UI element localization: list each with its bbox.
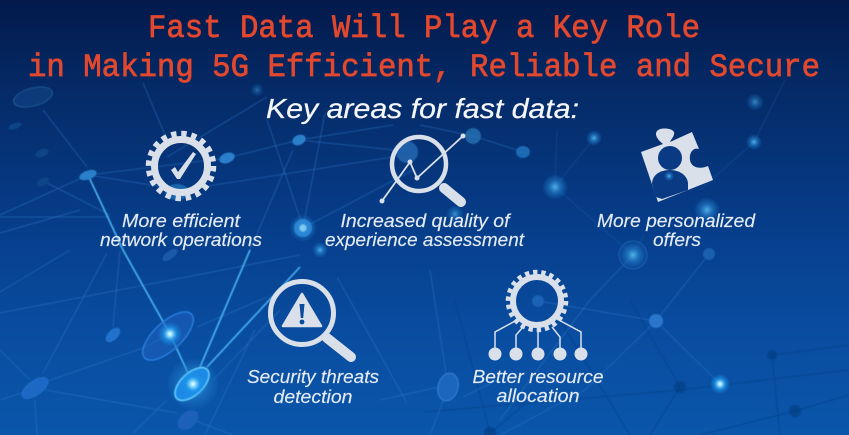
icon: gear with check mark: [148, 134, 214, 198]
label: [325, 211, 525, 250]
item: network operations: [100, 134, 262, 250]
icon: puzzle piece with person: [641, 128, 713, 202]
icon: gear with five nodes: [488, 272, 588, 360]
label: [247, 367, 379, 407]
label: offers: [653, 230, 701, 250]
label: [597, 211, 756, 250]
label: More personalized: [597, 211, 756, 231]
label: Increased quality of: [340, 211, 512, 231]
title: [28, 10, 820, 86]
title: Fast Data Will Play a Key Role: [148, 10, 700, 47]
label: [100, 211, 262, 250]
icon: magnifier with warning triangle: [270, 282, 351, 357]
label: More efficient: [122, 211, 241, 231]
item: quality of experience: [325, 134, 525, 250]
item: personalized offers: [597, 128, 756, 250]
item: resource allocation: [472, 272, 604, 406]
glowing node: upper: [135, 304, 201, 368]
icon: magnifier with chart: [380, 134, 466, 204]
label: network operations: [100, 230, 262, 250]
label: detection: [274, 387, 352, 407]
label: [472, 367, 604, 406]
label: allocation: [496, 386, 580, 406]
item: security threats: [247, 282, 379, 407]
network nodes: [7, 83, 801, 435]
glowing node: lower: [166, 357, 220, 411]
label: experience assessment: [325, 230, 525, 250]
subtitle: Key areas for fast data:: [266, 93, 579, 124]
label: Security threats: [247, 367, 379, 387]
title: in Making 5G Efficient, Reliable and Secure: [28, 49, 820, 86]
label: Better resource: [472, 367, 604, 387]
